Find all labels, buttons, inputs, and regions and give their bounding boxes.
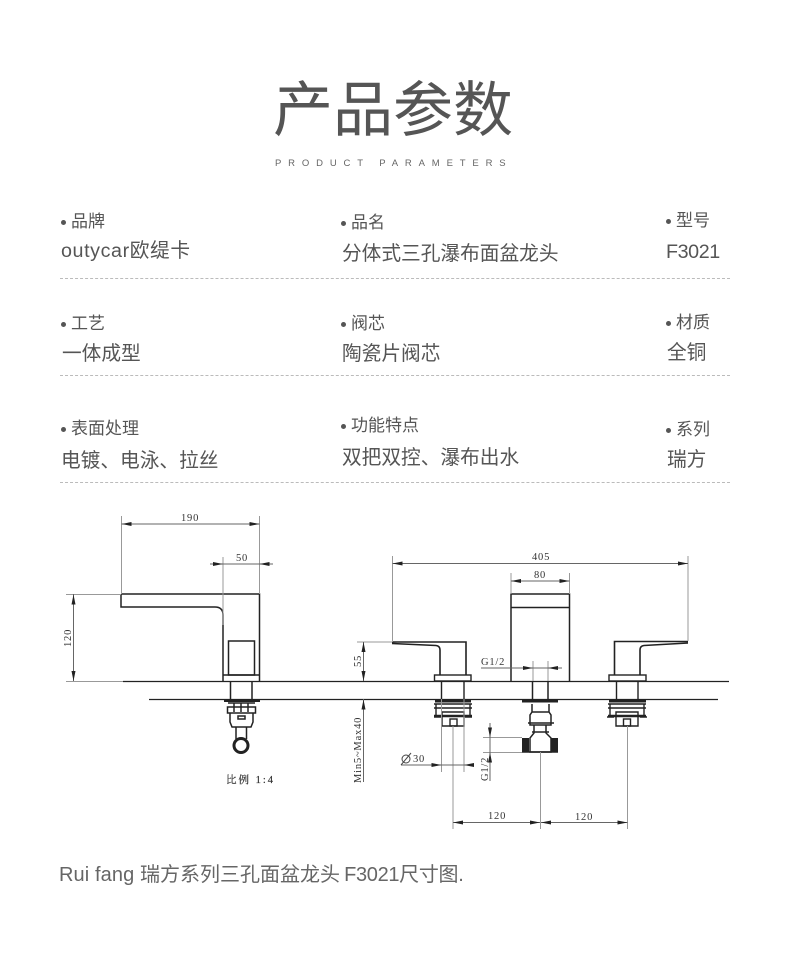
parameter: features: 双把双控、瀑布出水 <box>342 447 519 469</box>
parameter: valve core: 陶瓷片阀芯 <box>342 343 440 365</box>
dimension: 80: 80 <box>534 570 546 581</box>
caption: Rui fang 瑞方系列三孔面盆龙头 F3021尺寸图. <box>59 864 463 886</box>
dimension lines <box>66 516 688 829</box>
dimension: 80 <box>511 570 570 583</box>
dimension: 120 right spacing <box>541 812 628 824</box>
dimension: 405 <box>392 552 688 566</box>
parameter: craft: 工艺 <box>71 314 105 333</box>
dimension: G1/2 vertical: G1/2 <box>480 757 491 781</box>
left handle <box>392 642 472 726</box>
dimension: G1/2 vertical <box>480 723 492 781</box>
parameter: product name: 分体式三孔瀑布面盆龙头 <box>342 243 559 265</box>
parameter: brand: outycar欧缇卡 <box>61 240 191 262</box>
parameter: surface treatment <box>61 419 218 472</box>
title: 产品参数 <box>273 77 513 144</box>
dimension: G1/2 horizontal: G1/2 <box>481 657 505 668</box>
parameter: valve core: 阀芯 <box>351 314 385 333</box>
parameter: surface treatment: 表面处理 <box>71 419 139 438</box>
parameter: series: 瑞方 <box>667 449 706 471</box>
parameter: brand <box>61 212 191 262</box>
dimension: 120 left spacing <box>453 811 540 824</box>
dimension: 120 height <box>63 594 76 681</box>
parameter: features: 功能特点 <box>351 416 419 435</box>
dimension: 405: 405 <box>532 552 550 563</box>
dimension: 55 <box>353 642 366 681</box>
dimension: 50 <box>210 553 273 566</box>
parameter: brand: 品牌 <box>71 212 105 231</box>
parameter: series <box>666 420 710 471</box>
subtitle: PRODUCT PARAMETERS <box>275 158 512 169</box>
dimension: 190 <box>122 513 260 526</box>
dimension: 190: 190 <box>181 513 199 524</box>
dimension: 120 left spacing: 120 <box>488 811 506 822</box>
dimension: diameter 30: 30 <box>413 754 425 765</box>
parameter: model: 型号 <box>676 211 710 230</box>
centre spout <box>511 594 570 752</box>
parameter: craft <box>61 314 141 365</box>
parameter: product name <box>341 213 559 265</box>
dimension: 50: 50 <box>236 553 248 564</box>
parameter: series: 系列 <box>676 420 710 439</box>
dimension: 55: 55 <box>353 655 364 667</box>
parameter: features <box>341 416 519 469</box>
dimension: Min5-Max40: Min5~Max40 <box>353 717 364 783</box>
parameter: material <box>666 313 710 364</box>
scale note: 比例 1:4 <box>226 773 275 786</box>
parameter: model <box>666 211 720 263</box>
parameter: material: 全铜 <box>667 342 706 364</box>
parameter: model: F3021 <box>666 241 720 263</box>
side view faucet <box>121 594 260 752</box>
parameter: surface treatment: 电镀、电泳、拉丝 <box>61 450 218 472</box>
dimension: G1/2 horizontal <box>481 657 562 670</box>
parameter: craft: 一体成型 <box>62 343 141 365</box>
dimension: 120 right spacing: 120 <box>575 812 593 823</box>
parameter: material: 材质 <box>676 313 710 332</box>
counter surfaces <box>123 682 729 700</box>
dimension: diameter 30 <box>401 753 474 767</box>
right handle <box>607 642 688 726</box>
parameter: product name: 品名 <box>351 213 385 232</box>
dimension: Min5-Max40 <box>353 699 366 783</box>
parameter: valve core <box>341 314 440 365</box>
dimension: 120 height: 120 <box>63 629 74 647</box>
